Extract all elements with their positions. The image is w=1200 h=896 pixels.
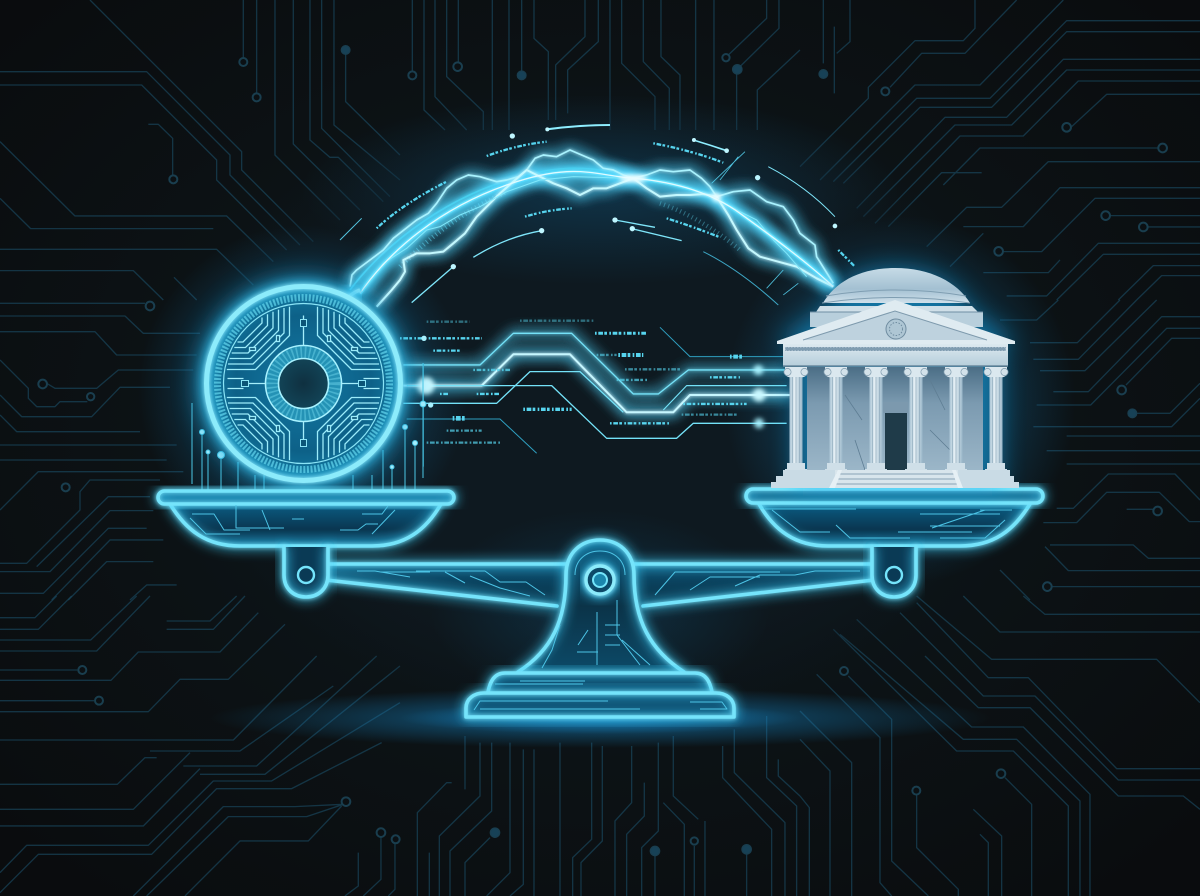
data glyph strips — [400, 321, 747, 443]
tick lines below coin — [192, 363, 426, 490]
main arc — [360, 172, 833, 293]
centre fade over background — [180, 80, 1020, 720]
glowing nodes — [417, 336, 766, 428]
right hanger — [872, 547, 916, 597]
data fragments around arc — [340, 125, 855, 305]
circuit traces: top left — [0, 0, 400, 300]
temple entablature — [783, 342, 1008, 366]
circuit traces: middle left — [0, 302, 200, 600]
temple dome — [810, 268, 983, 327]
left hanger — [284, 547, 328, 597]
data circuit lines between coin and temple — [400, 321, 790, 467]
upper base — [488, 673, 712, 692]
lightning bolts — [350, 150, 833, 307]
icon: classical bank temple — [771, 268, 1019, 488]
coin centre ring — [266, 346, 342, 422]
circuit traces: middle right — [1000, 300, 1200, 600]
panel: right scale pan — [746, 489, 1043, 546]
lower base — [466, 693, 734, 717]
panel: left scale pan — [158, 491, 454, 546]
temple pediment — [777, 300, 1015, 344]
circuit traces: top centre — [408, 0, 800, 130]
temple columns — [784, 367, 1008, 474]
circuit traces: bottom left — [0, 596, 400, 896]
ambient glow — [138, 95, 1075, 748]
balance beam — [320, 564, 880, 606]
coin rim ticks — [218, 298, 390, 470]
temple walls — [807, 367, 983, 470]
energy arc with lightning — [340, 125, 855, 307]
scale pillar and base — [466, 540, 734, 717]
temple steps — [771, 470, 1019, 488]
circuit traces: bottom right — [800, 596, 1200, 896]
circuit traces: bottom centre — [417, 716, 800, 896]
coin circuit pattern — [227, 307, 380, 460]
temple door — [883, 402, 908, 470]
circuit traces: top right — [800, 0, 1200, 300]
pivot ring — [586, 566, 614, 594]
temple glow — [777, 268, 1015, 488]
pillar bell — [518, 540, 684, 672]
icon: circuit coin — [196, 276, 412, 492]
